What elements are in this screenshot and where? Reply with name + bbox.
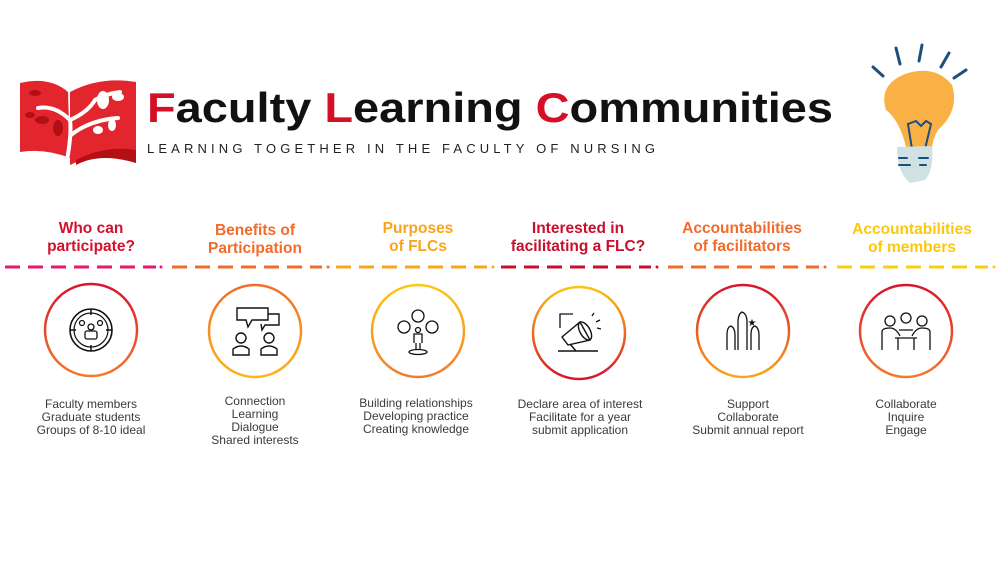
text 2: Shared interests [211,433,299,447]
icon circle 4: megaphone [533,287,625,379]
text 2: Learning [232,407,278,421]
text 4: Facilitate for a year [529,410,631,424]
heading 6: Accountabilities [852,221,972,238]
icon circle 3: network [372,285,464,377]
logo: red book with tree [20,80,136,165]
icon circle 2: dialogue [209,285,301,377]
heading 3: of FLCs [389,238,447,255]
column 4: interested in facilitating [501,220,658,437]
text 3: Building relationships [359,396,473,410]
text 1: Graduate students [42,410,140,424]
heading 4: Interested in [532,220,624,237]
heading 5: of facilitators [693,238,791,255]
heading 4: facilitating a FLC? [511,238,645,255]
subtitle: LEARNING TOGETHER IN THE FACULTY OF NURSING [147,141,655,156]
text 4: Declare area of interest [518,397,643,411]
text 3: Developing practice [363,409,469,423]
heading 2: Participation [208,240,302,257]
text 2: Connection [225,394,285,408]
icon circle 1: target group [45,284,137,376]
heading 1: Who can [59,220,123,237]
heading 6: of members [868,239,956,256]
text 6: Collaborate [875,397,937,411]
column 1: who can participate [5,220,162,437]
text 1: Groups of 8-10 ideal [37,423,145,437]
text 4: submit application [532,423,628,437]
icon circle 6: meeting [860,285,952,377]
column 2: benefits [172,222,330,447]
icon circle 5: raised hands [697,285,789,377]
heading 3: Purposes [383,220,453,237]
text 1: Faculty members [45,397,137,411]
icon circle 5: raised hands: ★ [748,318,757,329]
text 3: Creating knowledge [363,422,469,436]
title: Faculty Learning Communities [147,84,833,131]
text 2: Dialogue [231,420,279,434]
text 5: Submit annual report [692,423,804,437]
text 6: Engage [885,423,927,437]
heading 1: participate? [47,238,135,255]
heading 2: Benefits of [215,222,296,239]
text 6: Inquire [888,410,925,424]
icon: light bulb [873,45,966,183]
heading 5: Accountabilities [682,220,802,237]
column 3: purposes [336,220,494,436]
column 6: accountabilities of members [837,221,996,437]
text 5: Support [727,397,770,411]
column 5: accountabilities of facilitators [668,220,826,437]
text 5: Collaborate [717,410,779,424]
